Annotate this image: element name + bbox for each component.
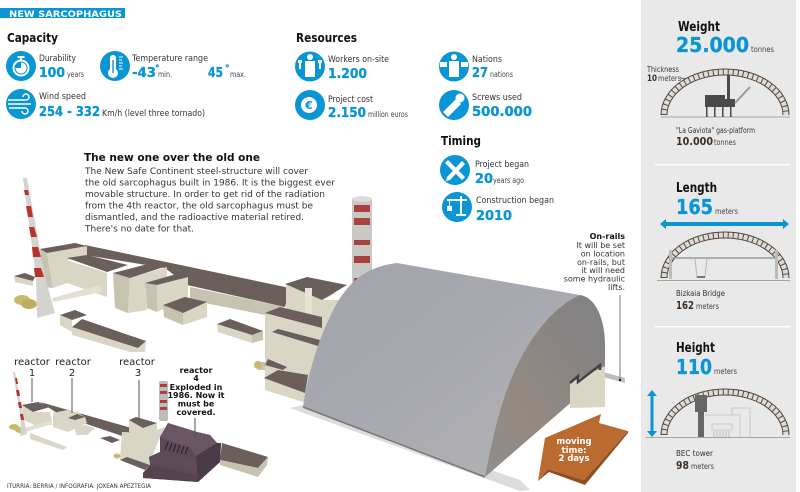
panel: resources: Project cost [328, 95, 373, 105]
callout: on-rails: on-rails, but [577, 258, 625, 267]
weight: Thickness [646, 65, 679, 74]
illustration: old power plant [14, 178, 377, 402]
labels: reactors: reactor [55, 357, 92, 368]
text block: the new one over the old one: There's no date for that. [84, 224, 194, 234]
title banner: NEW SARCOPHAGUS [9, 10, 122, 20]
icon: thermometer [100, 51, 130, 81]
icon: stopwatch [6, 51, 36, 81]
text block: the new one over the old one: movable structure. In order to get rid of the radiation [85, 190, 325, 200]
height: 110 [676, 355, 712, 379]
panel: resources: Workers on-site [328, 55, 389, 65]
panel: resources: nations [490, 70, 513, 79]
text block: the new one over the old one: dismantled, and the radioactive material retired. [85, 213, 304, 223]
length: Length [676, 181, 717, 196]
labels: reactors: 4 [193, 374, 199, 383]
panel: capacity: -43 [132, 65, 156, 81]
panel: resources: Nations [472, 55, 502, 65]
callout: on-rails: some hydraulic [564, 274, 625, 284]
panel: capacity: 254 - 332 [39, 104, 100, 120]
arrow: moving time: 2 days [558, 454, 590, 464]
panel: capacity: max. [230, 70, 246, 79]
icon: worker [295, 52, 325, 82]
panel: resources: Resources [296, 30, 357, 45]
labels: reactors: 1 [29, 368, 35, 379]
weight [646, 20, 790, 148]
panel: timing: Construction began [476, 196, 554, 206]
arrow: moving time: moving [556, 437, 592, 447]
callout: on-rails: on location [581, 250, 625, 258]
title banner [0, 8, 125, 20]
icon: wind [6, 89, 36, 119]
panel: comparison sidebar [641, 0, 796, 492]
weight: tonnes [714, 138, 736, 147]
panel: capacity: years [67, 70, 84, 79]
panel: resources: 2.150 [328, 105, 366, 121]
panel: capacity: 100 [39, 65, 65, 81]
arrow: width [660, 219, 789, 229]
icon: nations [439, 52, 469, 82]
panel: capacity: Durability [39, 54, 77, 64]
panel: capacity: ° [225, 64, 230, 74]
labels: reactors: reactor [14, 357, 51, 368]
arrow: height [647, 390, 657, 437]
labels: reactors: 2 [69, 368, 75, 379]
length: 165 [676, 195, 713, 219]
length: meters [715, 207, 738, 216]
panel: timing: years ago [493, 176, 524, 185]
callout: on-rails: It will be set [576, 241, 625, 250]
labels: reactors: must be [178, 400, 215, 408]
icon: pencil and ruler [440, 155, 470, 185]
labels: reactors: reactor [119, 357, 156, 368]
panel: timing: 20 [475, 171, 493, 187]
icon: crane [442, 192, 472, 222]
height: 98 [676, 460, 689, 472]
labels: reactors: reactor [180, 366, 212, 375]
icon: euro [295, 90, 325, 120]
reactor 4: old sarcophagus [143, 423, 221, 482]
icon: bridge [669, 250, 778, 279]
text block: the new one over the old one: The New Safe Continent steel-structure will cover [84, 167, 308, 177]
callout: on-rails: it will need [581, 266, 625, 275]
weight: tonnes [751, 45, 774, 54]
height: Height [676, 341, 715, 356]
panel: timing: 2010 [476, 208, 512, 224]
panel: resources [295, 30, 532, 121]
weight: Weight [678, 20, 720, 35]
panel: capacity: min. [158, 70, 172, 79]
weight: 10 [647, 74, 657, 84]
panel: capacity: Capacity [7, 30, 58, 45]
panel: capacity: Wind speed [39, 92, 86, 102]
length: Bizkaia Bridge [676, 289, 725, 298]
text block: the new one over the old one [84, 151, 335, 234]
callout: on-rails: On-rails [590, 232, 625, 241]
panel: timing [440, 133, 554, 224]
text block: the new one over the old one: from the 4th reactor, the old sarcophagus must be [85, 202, 313, 212]
panel: capacity: Km/h (level three tornado) [102, 109, 205, 119]
text block: the new one over the old one: the old sarcophagus built in 1986. It is the biggest ever [85, 178, 335, 188]
icon: screw [439, 90, 469, 120]
arrow: moving time: time: [562, 446, 586, 456]
panel: capacity: Temperature range [131, 54, 208, 64]
icon: gas platform [705, 75, 750, 117]
height: BEC tower [676, 449, 714, 458]
weight: 25.000 [676, 33, 749, 57]
panel: timing: Project began [475, 160, 529, 170]
length: meters [696, 302, 719, 311]
labels: reactors: covered. [176, 408, 216, 417]
panel: capacity: ° [155, 64, 160, 74]
height [646, 341, 790, 472]
chimney: small striped stack [13, 372, 27, 436]
credit: ITURRIA: BERRIA / INFOGRAFIA: JOXEAN APEZTEGIA [7, 483, 152, 490]
labels: reactors: 3 [135, 368, 141, 379]
icon: tower [695, 395, 750, 437]
chimney: small lattice stack [159, 381, 168, 421]
callout: on-rails: lifts. [608, 283, 625, 292]
weight: 10.000 [676, 135, 713, 148]
height: meters [714, 367, 737, 376]
icon: euro: € [304, 99, 313, 112]
panel: resources: 500.000 [472, 104, 532, 120]
illustration: reactor row [9, 372, 268, 482]
panel: capacity [6, 30, 246, 120]
panel: resources: 27 [472, 65, 488, 81]
labels: reactors: Exploded in [170, 383, 223, 392]
illustration: new sarcophagus dome [290, 263, 625, 491]
chimney: striped stack [23, 178, 55, 318]
weight: meters [658, 74, 681, 83]
panel: capacity: 45 [208, 65, 223, 81]
arrow: moving time [538, 414, 628, 485]
text block: the new one over the old one: The new one over the old one [84, 151, 260, 164]
panel: resources: Screws used [472, 93, 522, 103]
panel: timing: Timing [441, 133, 481, 148]
panel: resources: million euros [368, 110, 408, 119]
labels: reactors [14, 357, 225, 440]
length [657, 181, 790, 312]
panel: resources: 1.200 [328, 66, 367, 82]
height: meters [691, 462, 714, 471]
labels: reactors: 1986. Now it [167, 391, 225, 400]
weight: "La Gaviota" gas-platform [676, 126, 755, 135]
chimney: lattice stack [346, 196, 377, 300]
callout: on-rails [564, 232, 625, 381]
length: 162 [676, 300, 694, 312]
